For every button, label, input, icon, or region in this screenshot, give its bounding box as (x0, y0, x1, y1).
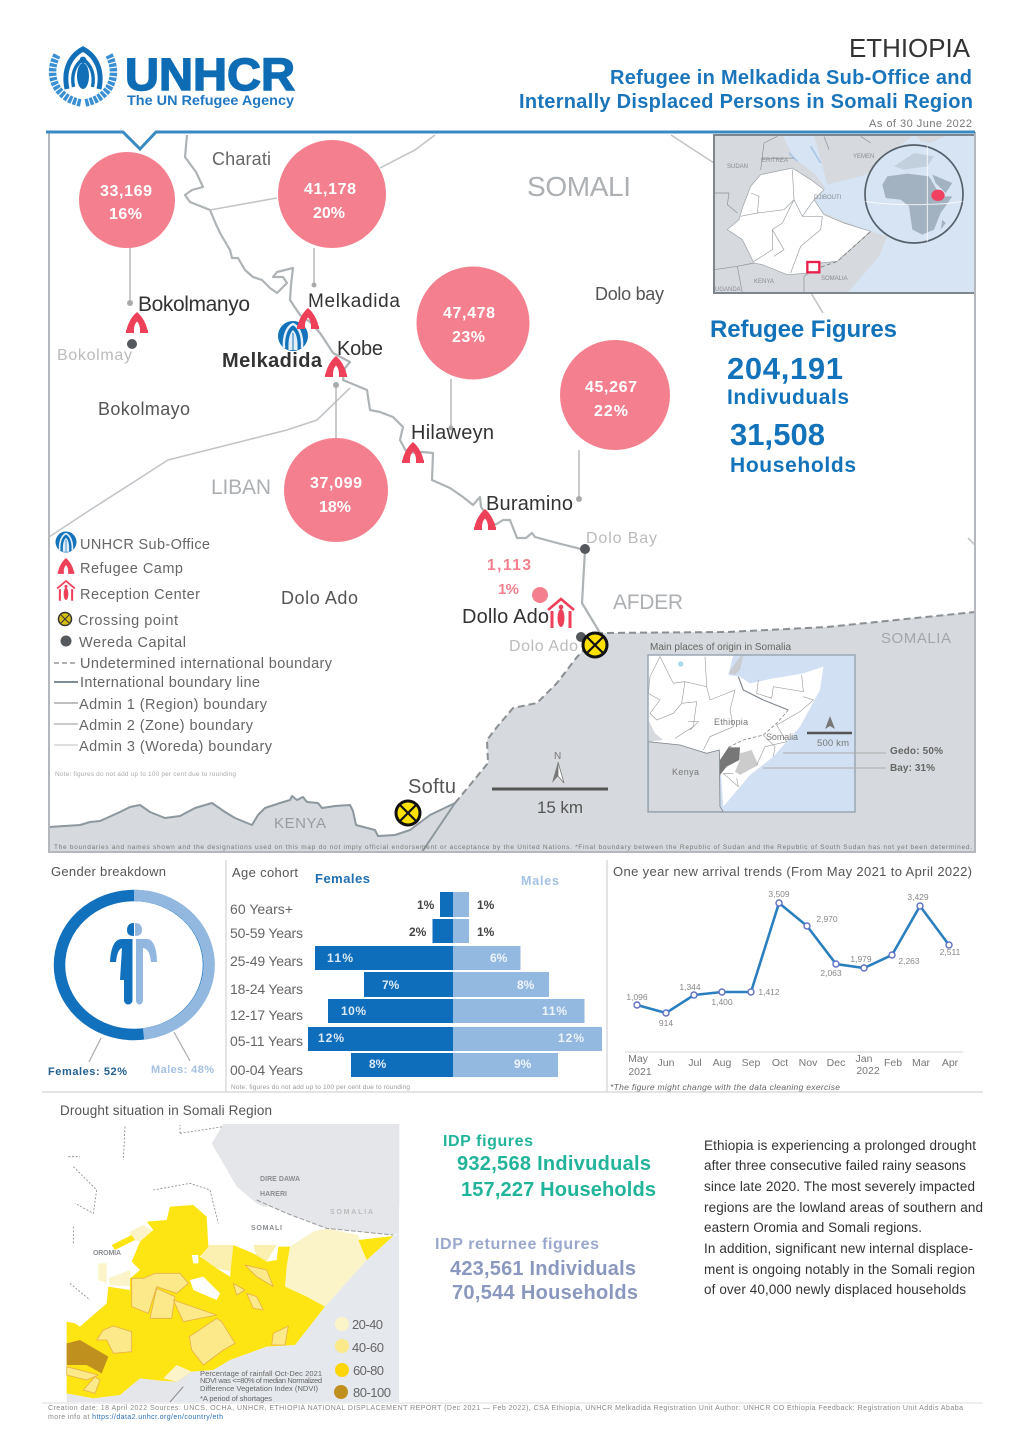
inset map: Ethiopia locator: YEMEN (853, 154, 874, 160)
inset map: places of origin in Somalia: Ethiopia (714, 717, 748, 727)
bubble: Buramino: 22% (594, 403, 628, 420)
map labels: OROMIA (93, 1250, 121, 1257)
bubble: Bokolmanyo (79, 152, 175, 248)
bubble: Buramino (560, 340, 670, 450)
age labels: 00-04 Years (230, 1062, 303, 1078)
line chart month axis: Feb (884, 1057, 902, 1069)
map legend: 40-60 (352, 1340, 384, 1355)
leader lines (89, 1032, 190, 1062)
heading: Age cohort (232, 865, 298, 880)
line chart value labels: 3,429 (907, 892, 929, 902)
callouts: Gedo and Bay: Gedo: 50% (890, 746, 943, 757)
river and zone boundary (185, 135, 600, 633)
text block: drought narrative: after three consecutive failed rainy seasons (704, 1158, 966, 1173)
legend: reception center (57, 581, 200, 603)
map note: Difference Vegetation Index (NDVI) (200, 1384, 318, 1393)
bar value labels: 8% (369, 1057, 387, 1071)
line chart value labels: 1,400 (711, 997, 733, 1007)
heading: One year new arrival trends (From May 2021 to April 2022) (613, 864, 972, 879)
bubble: Melkadida: 20% (313, 205, 345, 222)
icon: UNHCR sub-office (278, 321, 308, 351)
map note (200, 1369, 322, 1403)
map legend: 20-40 (352, 1317, 383, 1332)
place labels: Charati (212, 149, 271, 169)
place labels: KENYA (274, 815, 326, 832)
map labels (93, 1176, 373, 1257)
legend: refugee camp (58, 558, 183, 577)
inset map: Ethiopia locator: ERITREA (762, 158, 788, 164)
place labels: Dolo bay (595, 284, 664, 304)
text block: drought narrative (704, 1138, 983, 1297)
logo tagline: The UN Refugee Agency (127, 92, 294, 108)
inset map: Ethiopia locator: SUDAN (727, 164, 748, 170)
households: 70,544 Households (452, 1282, 638, 1304)
arrow: north: N (554, 751, 561, 762)
leader lines (130, 248, 579, 499)
text block: drought narrative: of over 40,000 newly displaced households (704, 1282, 966, 1297)
map labels: DIRE DAWA (260, 1176, 300, 1183)
line chart month axis: May (628, 1053, 649, 1065)
place labels (57, 149, 951, 832)
neighbouring land: Kenya and Somalia (49, 612, 975, 852)
bubble: Kobe: 18% (319, 499, 351, 516)
place labels: Bokolmay (57, 347, 132, 364)
line chart value labels (626, 889, 961, 1028)
legend: crossing point: Crossing point (78, 613, 178, 629)
heading: IDP returnee figures (435, 1236, 599, 1253)
place labels: Bokolmanyo (138, 293, 250, 316)
place labels: Hilaweyn (411, 422, 494, 444)
line chart (625, 900, 963, 1052)
map labels: SOMALI (251, 1225, 282, 1232)
place labels: Dollo Ado (462, 606, 549, 628)
heading: IDP figures (443, 1133, 533, 1150)
map labels: SOMALIA (330, 1209, 373, 1216)
legend: sub-office (56, 532, 210, 553)
place labels: AFDER (613, 591, 683, 614)
text block: drought narrative: ment is ongoing notably in the Somali region (704, 1262, 975, 1277)
line chart month axis: 2022 (856, 1065, 880, 1077)
section dividers (42, 860, 983, 1092)
text block: drought narrative: In addition, significant new internal displace- (704, 1241, 973, 1256)
map note: Percentage of rainfall Oct-Dec 2021 (200, 1369, 322, 1378)
title: country: ETHIOPIA (849, 33, 971, 63)
inset map: places of origin in Somalia: Somalia (766, 732, 798, 742)
text block: drought narrative: regions are the lowland areas of southern and (704, 1200, 983, 1215)
line chart month axis: 2021 (628, 1066, 652, 1078)
inset map: Ethiopia locator: SOMALIA (821, 276, 848, 282)
inset map: places of origin in Somalia (648, 642, 943, 812)
logo wordmark: UNHCR (125, 49, 295, 100)
bar value labels: 11% (327, 951, 353, 965)
males share: Males: 48% (151, 1064, 214, 1076)
note: Note: figures do not add up to 100 per cent due to rounding (231, 1084, 410, 1091)
line chart value labels: 1,412 (758, 987, 780, 997)
bubble: Dollo Ado (487, 557, 548, 603)
bar value labels (318, 898, 584, 1071)
map labels: HARERI (260, 1191, 287, 1198)
bar value labels: 9% (514, 1057, 532, 1071)
icon: reception center (548, 599, 574, 628)
panel: drought situation (60, 1103, 399, 1403)
line chart value labels: 1,096 (626, 992, 648, 1002)
legend: undetermined boundary: Undetermined international boundary (80, 656, 333, 672)
place labels: Dolo Ado (281, 588, 358, 608)
place labels: SOMALI (527, 171, 631, 202)
line chart month axis: Jul (688, 1057, 702, 1069)
bar value labels: 11% (542, 1004, 567, 1018)
line chart month axis: Oct (772, 1057, 788, 1069)
place labels: Melkadida (222, 350, 323, 372)
line chart value labels: 2,063 (820, 968, 842, 978)
place labels: Melkadida (308, 291, 400, 312)
icon: crossing point Dolo Ado (583, 633, 607, 657)
legend: international boundary: International boundary line (80, 675, 260, 691)
map legend: 80-100 (353, 1385, 391, 1400)
disclaimer: The boundaries and names shown and the designations used on this map do not imply official endorsement or acceptance by the United Nations. *Final boundary between the Republic of Sudan and the Republic of South Sudan has not yet been determined. (54, 844, 972, 851)
footer (42, 1403, 983, 1421)
bar value labels: 12% (558, 1031, 584, 1045)
heading: Drought situation in Somali Region (60, 1103, 272, 1118)
place labels: Dolo Ado (509, 638, 578, 655)
individuals label: Indivuduals (727, 386, 849, 409)
bubble: Melkadida: 41,178 (304, 181, 356, 198)
place labels: Dolo Bay (586, 530, 657, 547)
line chart month axis (628, 1053, 959, 1078)
legend: refugee camp: Refugee Camp (80, 561, 183, 577)
legend (54, 532, 333, 755)
age labels: 05-11 Years (230, 1033, 303, 1049)
heading: Gender breakdown (51, 864, 166, 879)
map legend (334, 1317, 391, 1400)
icon: gender figure (110, 923, 157, 1004)
age labels: 12-17 Years (230, 1007, 303, 1023)
legend: admin 2: Admin 2 (Zone) boundary (79, 718, 254, 734)
bubble: Bokolmanyo: 33,169 (100, 183, 152, 200)
age labels: 25-49 Years (230, 953, 303, 969)
text block: drought narrative: since late 2020. The most severely impacted (704, 1179, 975, 1194)
bubble: Hilaweyn: 23% (452, 329, 485, 346)
bar value labels: 1% (417, 898, 435, 912)
individuals: 932,568 Indivuduals (457, 1153, 651, 1175)
bar value labels: 12% (318, 1031, 344, 1045)
line chart month axis: Sep (742, 1057, 760, 1069)
footer: Creation date: 18 April 2022 Sources: UNCS, OCHA, UNHCR, ETHIOPIA NATIONAL DISPLACEMENT REPORT (Dec 2021 — Feb 2022), CSA Ethiopia, UNHCR Melkadida Registration Unit Author: UNHCR CO Ethiopia Feedback: Registration Unit Addis Ababa (48, 1405, 963, 1412)
line chart month axis: Jan (856, 1053, 873, 1065)
map frame (49, 132, 975, 852)
place labels: Kobe (337, 338, 383, 360)
inset map: places of origin in Somalia: Kenya (672, 767, 699, 777)
place labels: Buramino (486, 493, 573, 515)
individuals: 423,561 Individuals (450, 1258, 636, 1280)
line chart month axis: Mar (912, 1057, 931, 1069)
legend: admin 3: Admin 3 (Woreda) boundary (79, 739, 273, 755)
line chart value labels: 2,511 (940, 947, 961, 957)
inset map: Ethiopia locator: UGANDA (715, 287, 741, 293)
legend: reception center: Reception Center (80, 587, 200, 603)
map note: NDVI was <=80% of median Normalized (200, 1376, 322, 1385)
line chart value labels: 914 (659, 1018, 673, 1028)
subtitle line two: Internally Displaced Persons in Somali Region (519, 91, 973, 113)
place labels: Bokolmayo (98, 399, 190, 419)
note: rounding: Note: figures do not add up to 100 per cent due to rounding (55, 771, 236, 778)
bubble: Hilaweyn (416, 266, 530, 380)
icon: crossing point Softu (396, 801, 420, 825)
females share: Females: 52% (48, 1066, 127, 1078)
bar chart: age pyramid (308, 892, 602, 1077)
scale bar: 15 km (537, 798, 583, 817)
bar value labels: 6% (490, 951, 508, 965)
bar value labels: 1% (477, 898, 495, 912)
place labels: Softu (408, 776, 456, 798)
text block: drought narrative: eastern Oromia and Somali regions. (704, 1220, 922, 1235)
bubble: Kobe (284, 438, 388, 542)
bubble: Bokolmanyo: 16% (109, 206, 142, 223)
line chart month axis: Apr (942, 1057, 959, 1069)
callouts: Gedo and Bay: Bay: 31% (890, 763, 935, 774)
panel: age cohort (230, 865, 602, 1091)
bar value labels: 10% (341, 1004, 366, 1018)
bubble: Melkadida (278, 140, 386, 248)
age labels: 50-59 Years (230, 925, 303, 941)
panel: gender breakdown (48, 864, 214, 1078)
date: As of 30 June 2022 (869, 118, 972, 130)
panel: main map (49, 132, 975, 852)
woreda boundaries (49, 135, 975, 545)
inset map: Ethiopia locator: DJIBOUTI (814, 195, 842, 201)
inset title: Main places of origin in Somalia (650, 642, 791, 653)
text block: drought narrative: Ethiopia is experiencing a prolonged drought (704, 1138, 976, 1153)
panel: IDP returnee figures (435, 1236, 638, 1304)
line chart month axis: Jun (658, 1057, 675, 1069)
header rule with notch (46, 132, 975, 149)
age labels (230, 901, 303, 1078)
line chart month axis: Nov (799, 1057, 818, 1069)
line chart value labels: 2,970 (816, 914, 838, 924)
icons: woreda capitals (127, 339, 590, 642)
line chart value labels: 2,263 (898, 956, 920, 966)
icon: UNHCR laurel emblem (53, 49, 113, 103)
map legend: 60-80 (353, 1363, 384, 1378)
bubble: Hilaweyn: 47,478 (443, 305, 495, 322)
panel: refugee figures (710, 316, 897, 477)
bar value labels: 2% (409, 925, 427, 939)
arrow: north (552, 751, 564, 783)
bubble: Dollo Ado: 1% (498, 581, 519, 598)
series label: males: Males (521, 874, 559, 888)
inset north arrow and scale (807, 716, 852, 749)
panel: arrival trends (610, 864, 972, 1092)
legend: sub-office: UNHCR Sub-Office (80, 537, 210, 553)
subtitle line one: Refugee in Melkadida Sub-Office and (610, 67, 972, 89)
scale bar (492, 789, 608, 817)
bar value labels: 7% (382, 978, 400, 992)
northern boundaries (68, 1124, 399, 1300)
legend: woreda capital: Wereda Capital (79, 635, 186, 651)
series label: females: Females (315, 871, 370, 886)
bar value labels: 1% (477, 925, 495, 939)
bubble: Kobe: 37,099 (310, 475, 362, 492)
map note: *A period of shortages (200, 1394, 272, 1403)
bar value labels: 8% (517, 978, 535, 992)
households: 157,227 Households (461, 1179, 656, 1201)
age labels: 18-24 Years (230, 981, 303, 997)
bubble: Buramino: 45,267 (585, 379, 637, 396)
bubble: Dollo Ado: 1,113 (487, 557, 531, 574)
callouts: Gedo and Bay (763, 746, 943, 774)
line chart month axis: Dec (827, 1057, 845, 1069)
place labels: SOMALIA (881, 630, 951, 647)
legend: admin 1: Admin 1 (Region) boundary (79, 697, 268, 713)
heading: Refugee Figures (710, 316, 897, 343)
line chart value labels: 1,979 (850, 954, 872, 964)
place labels: LIBAN (211, 476, 271, 499)
households value: 31,508 (730, 417, 825, 452)
logo: UNHCR (53, 49, 295, 108)
panel: IDP figures (443, 1133, 656, 1201)
individuals value: 204,191 (727, 351, 843, 386)
age labels: 60 Years+ (230, 901, 293, 917)
households label: Households (730, 454, 856, 477)
icons: refugee camps (126, 308, 496, 530)
chart note: *The figure might change with the data cleaning exercise (610, 1082, 840, 1092)
inset map: Ethiopia locator: KENYA (754, 279, 774, 285)
line chart value labels: 3,509 (768, 889, 790, 899)
line chart value labels: 1,344 (679, 982, 701, 992)
inset north arrow and scale: 500 km (817, 738, 849, 749)
footer: more info at https://data2.unhcr.org/en/country/eth (48, 1414, 223, 1421)
line chart month axis: Aug (713, 1057, 731, 1069)
choropleth map (67, 1123, 399, 1402)
inset map: Ethiopia locator (714, 135, 975, 293)
donut chart (60, 895, 209, 1034)
